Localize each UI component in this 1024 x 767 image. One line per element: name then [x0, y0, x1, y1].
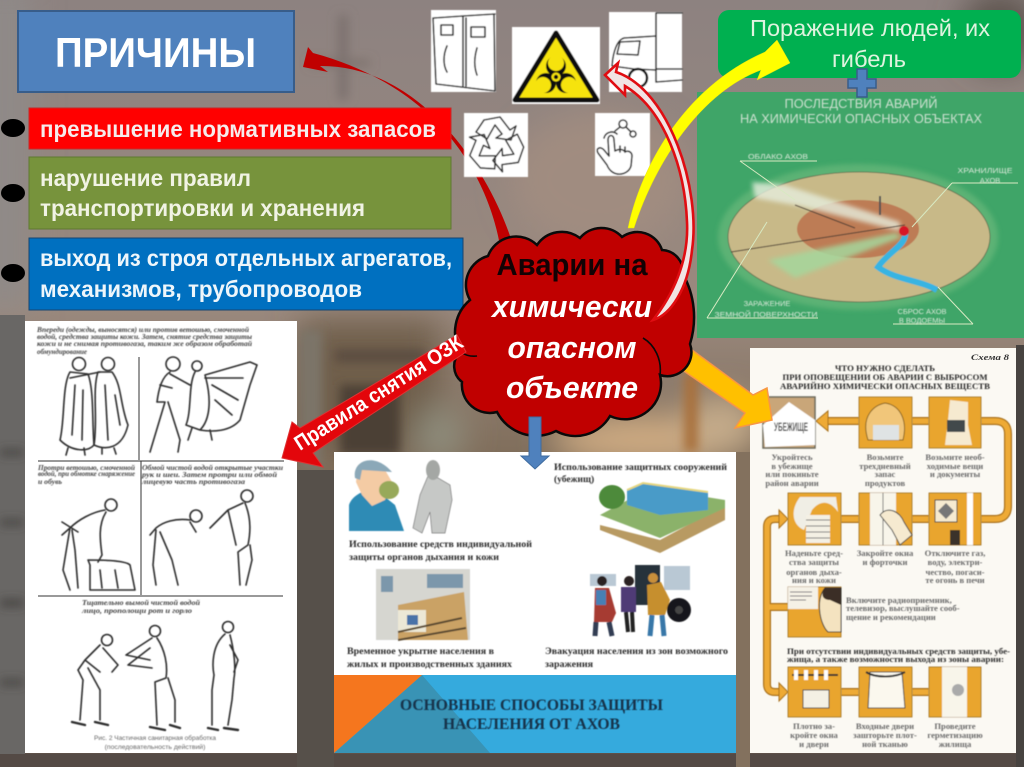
- heading: причины: ПРИЧИНЫ: [55, 29, 256, 76]
- step captions: Возьмите: [867, 452, 904, 462]
- step captions: продуктов: [865, 478, 905, 488]
- cause: агрегаты: выход из строя отдельных агрегатов,: [40, 245, 452, 271]
- step captions: Проведите: [934, 721, 976, 731]
- diagram labels: [714, 152, 1012, 325]
- step captions: воду, электри-: [928, 557, 983, 567]
- band title text: ОСНОВНЫЕ СПОСОБЫ ЗАЩИТЫ: [400, 697, 663, 714]
- cause: норматив: превышение нормативных запасов: [40, 116, 436, 142]
- step captions: органов дыха-: [786, 567, 842, 577]
- step captions: ства защиты: [789, 557, 839, 567]
- arrow: red to causes: [303, 47, 513, 245]
- step captions: трехдневный: [859, 461, 911, 471]
- step captions: и форточки: [863, 557, 908, 567]
- protection captions: Временное укрытие населения в: [347, 647, 494, 657]
- cloud title text: объекте: [506, 370, 638, 405]
- band title text: НАСЕЛЕНИЯ ОТ АХОВ: [443, 716, 620, 733]
- step captions: щение и рекомендации: [846, 612, 936, 622]
- cause: норматив: [29, 108, 451, 149]
- diagram labels: СБРОС АХОВ: [897, 307, 947, 316]
- callout: поражение людей: [718, 10, 1021, 78]
- sheet: figure caption: Рис. 2 Частичная санитарная обработка: [94, 734, 216, 742]
- diagram callout lines: [707, 161, 1018, 324]
- band title text: [400, 697, 663, 733]
- panel: последствия: [697, 92, 1024, 338]
- sheet: figure caption: [94, 734, 216, 751]
- diagram: affected area: [718, 164, 998, 310]
- callout: поражение людей: Поражение людей, их: [750, 15, 991, 41]
- flow pipes: [767, 411, 1008, 701]
- note without protection: При отсутствии индивидуальных средств защиты, убе-: [787, 646, 1010, 656]
- cause: агрегаты: [29, 238, 463, 310]
- scheme title: ПРИ ОПОВЕЩЕНИИ ОБ АВАРИИ С ВЫБРОСОМ: [782, 372, 988, 382]
- arrow: red-white to icons: [605, 63, 694, 320]
- cause: транспортировка: транспортировки и хранения: [40, 195, 365, 221]
- step captions: Возьмите необ-: [925, 452, 985, 462]
- sheet: instruction text: лицевую часть противогаза: [141, 477, 245, 486]
- scheme label: Схема 8: [971, 352, 1010, 362]
- step captions: Включите радиоприемник,: [846, 595, 952, 605]
- diagram title: [740, 96, 982, 126]
- arrow: правила снятия ОЗК: Правила снятия ОЗК: [290, 331, 467, 455]
- diagram title: НА ХИМИЧЕСКИ ОПАСНЫХ ОБЪЕКТАХ: [740, 111, 982, 126]
- sheet: instruction text: Тщательно вымой чистой водой: [82, 598, 200, 607]
- illustration: temporary shelter room: [376, 569, 470, 640]
- arrow: yellow to consequences: [628, 40, 790, 228]
- cause: транспортировка: нарушение правил: [40, 165, 251, 191]
- sheet: divider lines: [38, 357, 284, 596]
- sheet: instruction text: лицо, прополощи рот и горло: [81, 606, 192, 615]
- scheme title: [780, 363, 990, 391]
- diagram labels: ХРАНИЛИЩЕ: [958, 166, 1012, 175]
- step captions: герметизацию: [927, 730, 983, 740]
- callout: поражение людей: гибель: [832, 46, 906, 72]
- step captions: жилища: [939, 739, 972, 749]
- step captions: Входные двери: [856, 721, 914, 731]
- sheet: instruction text: Обмой чистой водой открытые участки: [142, 463, 283, 472]
- step captions: [765, 452, 985, 749]
- icon: cabinet: [431, 10, 496, 92]
- step captions: Закройте окна: [857, 548, 914, 558]
- central cloud: [454, 228, 694, 436]
- protection captions: [347, 462, 728, 670]
- sheet: instruction text: кожи и не снимая противогаза, таким же образом обработай: [37, 339, 252, 348]
- sheet: figure caption: (последовательность действий): [105, 743, 205, 751]
- panel: снятие ОЗК sheet: [25, 321, 297, 753]
- sheet: instruction text: и обувь: [38, 477, 63, 486]
- cloud title text: химически: [490, 289, 652, 324]
- sheet: instruction text: обмундирование: [37, 347, 88, 356]
- step captions: те огонь в печи: [925, 575, 985, 585]
- protection captions: жилых и производственных зданиях: [347, 660, 512, 670]
- diagram labels: ЗЕМНОЙ ПОВЕРХНОСТИ: [714, 310, 818, 319]
- illustration: man in respirator: [349, 460, 404, 531]
- sheet: instruction text: Протри ветошью, смоченной: [37, 463, 135, 472]
- icon: biohazard sign: [512, 27, 600, 104]
- illustration: protective suit: [413, 460, 452, 533]
- cause: транспортировка: [29, 157, 451, 229]
- sheet: instruction text: Впереди (одежды, выносятся) или против ветошью, смоченной: [36, 325, 249, 334]
- cloud title text: Аварии на: [496, 247, 648, 282]
- protection captions: защиты органов дыхания и кожи: [349, 553, 500, 563]
- step captions: чество, погаси-: [925, 567, 985, 577]
- sheet: instruction text: рук и шеи. Затем протри или обмой: [141, 470, 277, 479]
- step captions: район аварии: [765, 478, 819, 488]
- cloud title text: опасном: [508, 330, 637, 365]
- icon: blue plus: [848, 69, 876, 97]
- illustration: evacuation group: [590, 565, 691, 636]
- scheme title: АВАРИЙНО ХИМИЧЕСКИ ОПАСНЫХ ВЕЩЕСТВ: [780, 381, 990, 391]
- step captions: и документы: [930, 469, 980, 479]
- step icons: [763, 397, 981, 717]
- icon: recycle: [462, 113, 530, 177]
- step captions: кройте окна: [790, 730, 839, 740]
- diagram title: ПОСЛЕДСТВИЯ АВАРИЙ: [784, 96, 938, 111]
- step icons: УБЕЖИЩЕ: [774, 420, 808, 434]
- protection captions: Эвакуация населения из зон возможного: [545, 647, 728, 657]
- protection captions: Использование защитных сооружений: [554, 462, 728, 473]
- sheet: decontamination figures: [60, 357, 257, 730]
- step captions: ходимые вещи: [927, 461, 983, 471]
- arrow: orange to scheme: [675, 347, 772, 428]
- step captions: Отключите газ,: [925, 548, 985, 558]
- note without protection: [787, 646, 1010, 664]
- diagram labels: ЗАРАЖЕНИЕ: [744, 299, 790, 308]
- note without protection: жища, а также возможности выхода из зоны аварии:: [787, 654, 1004, 664]
- illustration: shelter building: [599, 483, 725, 553]
- diagram labels: В ВОДОЕМЫ: [899, 316, 946, 325]
- cloud title text: [490, 247, 652, 405]
- diagram labels: АХОВ: [980, 176, 1000, 185]
- diagram labels: ОБЛАКО АХОВ: [748, 152, 808, 161]
- protection captions: заражения: [545, 660, 593, 670]
- icon: touch hand: [595, 113, 650, 176]
- scheme title: ЧТО НУЖНО СДЕЛАТЬ: [835, 363, 935, 373]
- step captions: Плотно за-: [793, 721, 835, 731]
- bullet markers: [1, 119, 25, 282]
- step captions: Наденьте сред-: [785, 548, 843, 558]
- step captions: зашторьте плот-: [853, 730, 917, 740]
- step captions: и двери: [799, 739, 829, 749]
- step captions: запас: [875, 469, 896, 479]
- protection captions: Использование средств индивидуальной: [349, 539, 533, 550]
- step captions: ной тканью: [862, 739, 908, 749]
- step captions: в убежище: [771, 461, 813, 471]
- icon: truck: [609, 12, 682, 92]
- sheet: instruction text: [36, 325, 283, 615]
- step captions: телевизор, выслушайте сооб-: [846, 603, 960, 613]
- arrow: blue down: [521, 417, 549, 469]
- cause: агрегаты: механизмов, трубопроводов: [40, 276, 362, 302]
- protection captions: (убежищ): [554, 474, 594, 485]
- sheet: instruction text: водой, средства защиты кожи. Затем, снятие средства защиты: [37, 332, 252, 341]
- panel: что нужно сделать схема: [750, 348, 1016, 753]
- band: title background: [334, 675, 736, 753]
- panel: основные способы защиты: [334, 452, 736, 753]
- step captions: ния и кожи: [792, 575, 836, 585]
- sheet: instruction text: водой, при обмотке снаряжение: [38, 469, 136, 478]
- heading: причины: [18, 11, 294, 92]
- step captions: Укройтесь: [771, 452, 813, 462]
- step captions: или покиньте: [765, 469, 819, 479]
